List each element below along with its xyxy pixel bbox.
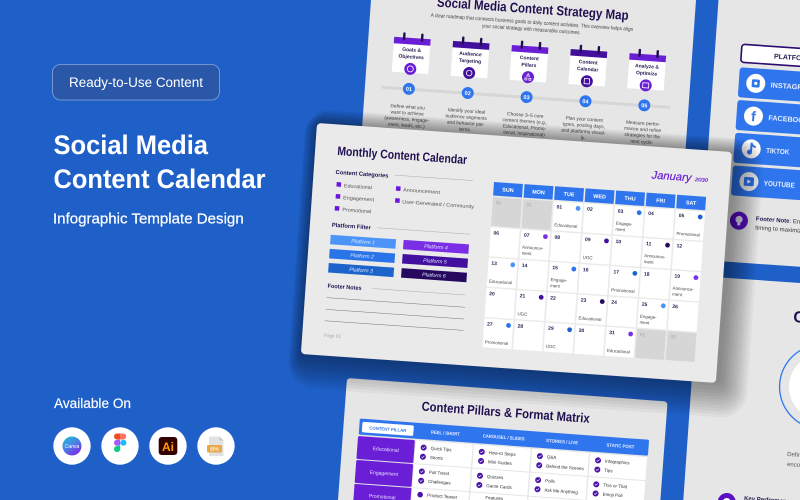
calendar grid: 07 [524,233,530,239]
content categories legend: Educational [344,183,372,191]
panel: monthly content calendar card [287,108,765,419]
calendar grid: 01 [556,204,563,211]
calendar grid: 30 [495,200,502,207]
calendar grid: Announce- [644,253,666,260]
matrix row engagement: Game Cards [486,483,513,490]
weekday header: WED [593,194,606,201]
calendar grid: ment [522,251,532,256]
calendar grid: 20 [489,291,495,298]
matrix row engagement: Poll Trend [429,470,450,476]
calendar grid: 18 [644,271,650,278]
calendar grid: 01 [639,332,646,339]
step 1 goals and objectives: want to achieve [390,109,424,118]
step 2 audience targeting: terns. [459,127,471,133]
platform row facebook: f [751,108,757,124]
step 4 content calendar [561,44,612,143]
step 4 content calendar: Content [579,59,598,66]
step 2 audience targeting: 02 [464,91,471,97]
weekday header: MON [532,189,545,196]
calendar grid: 29 [548,326,554,332]
weekday header: THU [624,196,636,203]
matrix row educational: Mini Guides [488,459,513,466]
footer note [729,211,800,237]
main title: Social Media [54,130,209,160]
step 5 analyze and optimize [623,48,667,147]
calendar grid: 08 [554,235,560,241]
step 4 content calendar: and platforms visual- [561,127,606,137]
weekday header: SUN [502,187,514,194]
calendar grid: 09 [585,237,591,243]
calendar grid: ment [639,320,650,325]
month label: January [650,169,693,184]
calendar grid: Announce- [522,245,544,251]
icon: adobe illustrator [149,427,187,465]
calendar grid: 31 [609,330,615,336]
step 1 goals and objectives: (awareness, engage- [384,115,430,124]
calendar grid [482,197,705,362]
calendar grid: 27 [487,321,493,328]
step 3 content pillars: 03 [523,95,530,101]
matrix row promotional [353,484,575,500]
step 5 analyze and optimize: next cycle. [630,139,653,146]
step 1 goals and objectives: Objectives [398,54,424,61]
matrix row engagement: This or That [603,483,628,489]
platform row tiktok: TIKTOK [766,146,790,157]
platform row youtube [731,165,800,204]
step 5 analyze and optimize: mance and refine [624,126,662,134]
step 4 content calendar: ly. [580,135,585,141]
calendar grid: ment [644,259,655,265]
calendar grid: Promotional [676,231,700,237]
platform heading pill [741,44,800,71]
step 2 audience targeting: Identify your ideal [447,107,485,116]
badge: ready-to-use content: Ready-to-Use Content [69,75,203,90]
step 3 content pillars: Choose 3–5 core [507,111,544,120]
step 4 content calendar: 04 [582,99,590,105]
subtitle: Infographic Template Design [53,211,244,227]
calendar grid: Educational [554,222,577,229]
platform row instagram [738,67,800,106]
weekday header: TUE [563,192,575,198]
content categories legend: Engagement [343,195,375,203]
calendar grid: 19 [674,274,680,280]
calendar grid: Educational [489,279,512,285]
content categories legend: Content Categories [335,170,389,180]
matrix row educational: Tips [604,468,614,473]
badge: ready-to-use content [52,64,220,100]
key performance item [717,492,794,500]
calendar grid: Educational [578,315,602,322]
icon: adobe illustrator: Ai [162,440,174,454]
step 4 content calendar: types, posting days, [562,121,605,130]
panel: content overview card [683,276,800,500]
calendar grid: 12 [676,243,683,250]
calendar grid: 13 [491,261,497,267]
step 2 audience targeting: audience segments [445,113,488,122]
calendar grid: 30 [578,328,585,334]
icon: figma [101,427,139,465]
calendar grid: 21 [519,293,526,300]
calendar grid: 02 [670,334,676,341]
available on label: Available On [54,396,131,411]
matrix title: Content Pillars & Format Matrix [421,399,591,426]
step 2 audience targeting: and behavior pat- [447,120,485,128]
step 1 goals and objectives: Goals & [402,47,422,54]
matrix row promotional: Product Teaser [427,493,458,500]
calendar grid: 04 [648,211,654,217]
overview ring chart [777,342,800,432]
calendar grid: 05 [678,213,685,219]
matrix row educational: Infographics [605,459,630,465]
matrix row engagement: Ask Me Anything [544,487,579,495]
matrix header row: CAROUSEL / SLIDES [483,433,525,441]
matrix row engagement: Quizzes [487,474,504,480]
platform filter: Platform 3 [349,267,373,275]
calendar grid: 28 [517,324,524,330]
main title [54,130,266,194]
step 5 analyze and optimize: Analyze & [635,63,660,71]
content categories legend: User-Generated / Community [402,199,475,210]
calendar grid: 02 [587,207,593,213]
matrix row engagement: Engagement [370,470,399,478]
calendar grid: 06 [493,230,499,237]
matrix row educational: How-to Steps [489,450,517,457]
platform filter: Platform Filter [332,223,372,232]
weekday header: SAT [686,200,697,207]
platform filter: Platform 6 [422,272,446,280]
calendar grid: 24 [611,300,617,306]
matrix row engagement: Challenges [428,479,452,486]
step 2 audience targeting: Targeting [459,58,481,65]
calendar grid: 15 [552,265,558,271]
matrix row engagement: Polls [545,478,556,484]
step 3 content pillars [501,40,553,139]
calendar grid: Announce- [672,286,695,292]
matrix header row [359,419,649,456]
matrix row educational: Shorts [430,455,444,461]
calendar grid: Engage- [640,314,657,320]
calendar grid: 03 [617,209,624,215]
step 5 analyze and optimize: strategies for the [624,132,661,140]
calendar grid: 22 [550,295,556,302]
platform row facebook [735,100,800,139]
icon: eps file [197,427,235,465]
step 2 audience targeting [444,36,493,134]
step 1 goals and objectives: ment, leads, etc.) [388,122,425,130]
calendar grid: UGC [517,311,527,317]
calendar grid: ment [550,283,561,289]
step 3 content pillars: content themes (e.g., [502,117,548,126]
calendar grid: Promotional [611,287,635,294]
matrix header row: CONTENT PILLAR [369,425,407,433]
step 3 content pillars: Content [520,55,539,62]
content categories legend: Announcement [403,187,441,196]
step 3 content pillars: Pillars [521,62,537,69]
calendar grid: 25 [642,302,648,308]
content categories legend [333,170,476,222]
platform filter [328,223,470,282]
weekday header [493,182,706,210]
platform filter: Platform 2 [350,253,374,260]
weekday header: FRI [656,198,666,205]
step 1 goals and objectives: 01 [406,87,412,93]
calendar grid: ment [672,292,683,297]
calendar grid: 11 [646,241,652,248]
matrix row engagement: Emoji Poll [602,492,623,498]
matrix row educational: Q&A [547,454,557,460]
matrix row educational: Educational [372,446,399,454]
icon: eps file: EPS [210,447,219,452]
matrix header row: REEL / SHORT [431,430,460,437]
calendar grid: 17 [613,269,619,276]
calendar grid: 14 [522,263,528,269]
content categories legend: Promotional [342,207,371,215]
platform filter: Platform 1 [351,239,375,246]
icon: canva [53,427,91,465]
step 1 goals and objectives: Define what you [390,103,425,112]
step 4 content calendar: Plan your content [565,115,604,124]
matrix row educational: Behind the Scenes [546,464,585,471]
calendar grid: Educational [607,348,630,354]
step 1 goals and objectives [384,31,436,130]
step 5 analyze and optimize: Measure perfor- [626,120,661,128]
page number: Page 02 [324,333,341,340]
step 3 content pillars: tional, Inspirational) [503,130,545,139]
platform row youtube: YOUTUBE [764,179,795,190]
footer notes [325,284,466,330]
calendar grid: Engage- [550,277,568,283]
calendar grid: UGC [546,344,556,349]
calendar grid: 23 [581,298,587,304]
calendar grid: 10 [615,239,622,245]
strategy map subtitle: A clear roadmap that connects business goals to daily content activities. This overview helps align [430,13,633,33]
panel: platform list card [700,0,800,267]
platform filter: Platform 5 [423,258,447,266]
panel: content pillars matrix card [338,378,667,500]
step 4 content calendar: Calendar [577,66,599,74]
platform row tiktok [733,133,800,172]
step 5 analyze and optimize: 05 [641,103,648,110]
matrix row educational: Quick Tips [430,446,452,452]
calendar grid: UGC [583,255,593,260]
matrix header row: STORIES / LIVE [546,438,578,445]
calendar grid: Engage- [616,221,633,227]
footer notes: Footer Notes [327,284,362,292]
step 3 content pillars: Educational, Promo- [503,123,547,132]
platform filter: Platform 4 [424,244,448,251]
strategy map subtitle: your social strategy with measurable outcomes. [482,23,581,36]
calendar grid: 26 [672,304,678,310]
calendar grid: 16 [583,267,589,274]
calendar card title: Monthly Content Calendar [337,144,468,167]
main title: Content Calendar [54,164,266,194]
matrix row engagement [355,460,645,500]
calendar grid: 31 [526,202,532,209]
icon: canva: Canva [65,444,79,450]
calendar grid: Promotional [485,339,508,346]
step 5 analyze and optimize: Optimize [636,70,657,78]
overview description [786,452,800,470]
panel: strategy map card [357,0,696,222]
month label [650,169,709,185]
calendar grid: ment [615,227,626,232]
matrix row educational [356,436,647,480]
step 2 audience targeting: Audience [459,51,482,58]
month label: 2030 [694,177,708,184]
matrix header row: STATIC POST [606,442,635,450]
